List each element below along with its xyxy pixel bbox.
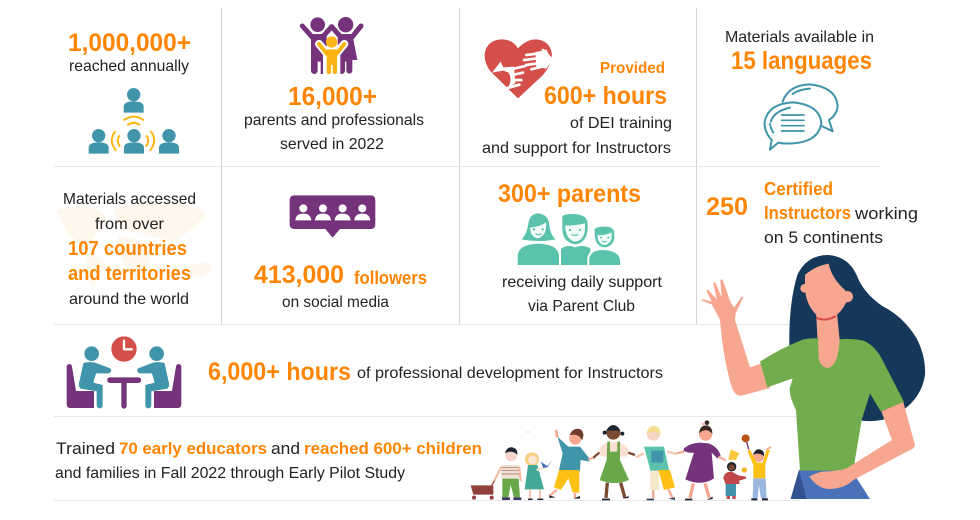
panel: 16,000+ parents and professionals xyxy=(244,17,424,153)
label: receiving daily support: receiving daily support xyxy=(502,274,663,291)
stat: 600+ hours: 600+ hours xyxy=(544,82,667,110)
neck and head xyxy=(800,264,853,368)
stat: 413,000: 413,000 xyxy=(254,261,344,289)
girl with bird xyxy=(525,431,553,500)
shirt xyxy=(760,338,904,471)
panel: early educators pilot study xyxy=(55,439,482,482)
label: of professional development for Instructors: of professional development for Instructors xyxy=(357,365,663,382)
label: and: and xyxy=(271,439,300,458)
stat: 70 early educators: 70 early educators xyxy=(119,439,267,458)
illustration: children holding hands xyxy=(471,420,771,500)
stat: 6,000+ hours: 6,000+ hours xyxy=(208,358,351,386)
label: via Parent Club: via Parent Club xyxy=(528,298,635,315)
girl in green dress xyxy=(593,425,635,500)
label: from over: from over xyxy=(95,216,165,233)
raised arm and hand xyxy=(701,279,770,396)
necklace xyxy=(816,316,836,320)
hair xyxy=(789,255,925,421)
label: Provided: Provided xyxy=(600,60,665,77)
label: served in 2022: served in 2022 xyxy=(280,136,384,153)
label: Trained: Trained xyxy=(56,439,115,458)
panel: 300+ parents xyxy=(498,180,663,315)
blond boy xyxy=(636,426,677,500)
skirt xyxy=(791,468,870,499)
icon: social media chat bubble xyxy=(290,195,375,238)
stat: 300+ parents: 300+ parents xyxy=(498,180,641,208)
icon: speech bubbles xyxy=(765,84,838,150)
woman in purple dress xyxy=(677,420,726,500)
label: Instructors: Instructors xyxy=(764,203,851,223)
panel: 6,000+ hours of professional development xyxy=(67,336,663,409)
panel: 600+ hours DEI training xyxy=(482,39,672,157)
label: on social media: on social media xyxy=(282,294,389,311)
stat: reached 600+ children: reached 600+ children xyxy=(304,439,482,458)
icon: family xyxy=(302,17,361,74)
label: parents and professionals: parents and professionals xyxy=(244,112,424,129)
label: working: working xyxy=(854,204,918,223)
toddler with flag xyxy=(723,449,747,499)
panel: 15 languages xyxy=(725,29,874,150)
panel: 250 Certified Instructors xyxy=(706,179,918,247)
boy with maraca xyxy=(742,434,771,500)
stat: and territories: and territories xyxy=(68,263,191,285)
lower arm and hand xyxy=(809,402,915,489)
label: Materials available in: Materials available in xyxy=(725,29,874,46)
label: Materials accessed: Materials accessed xyxy=(63,191,196,208)
stat: 16,000+: 16,000+ xyxy=(288,81,377,111)
label: reached annually: reached annually xyxy=(69,58,189,75)
stat: 15 languages: 15 languages xyxy=(731,47,872,75)
icon: parents and child xyxy=(517,213,621,266)
icon: connected people xyxy=(89,88,179,154)
label: Certified: Certified xyxy=(764,179,833,199)
boy in teal shirt xyxy=(549,429,595,499)
icon: two people at a table with clock xyxy=(67,336,181,409)
label: followers: followers xyxy=(354,268,427,288)
illustration: woman waving xyxy=(701,255,925,499)
label: around the world: around the world xyxy=(69,291,189,308)
label: of DEI training: of DEI training xyxy=(570,115,672,132)
stat: 250: 250 xyxy=(706,193,748,221)
label: on 5 continents: on 5 continents xyxy=(764,228,883,247)
stat: 107 countries: 107 countries xyxy=(68,238,187,260)
label: and support for Instructors: and support for Instructors xyxy=(482,140,671,157)
label: and families in Fall 2022: and families in Fall 2022 through Early Pilot Study xyxy=(55,465,405,482)
panel: 1,000,000+ reached annually xyxy=(68,29,191,154)
boy with striped shirt xyxy=(494,447,521,500)
icon: heart with hands xyxy=(485,39,552,98)
panel: 413,000 followers xyxy=(254,195,427,311)
world map background xyxy=(56,203,212,287)
wagon xyxy=(471,479,495,500)
panel: 107 countries and territories xyxy=(56,191,212,308)
stat: 1,000,000+: 1,000,000+ xyxy=(68,29,191,57)
